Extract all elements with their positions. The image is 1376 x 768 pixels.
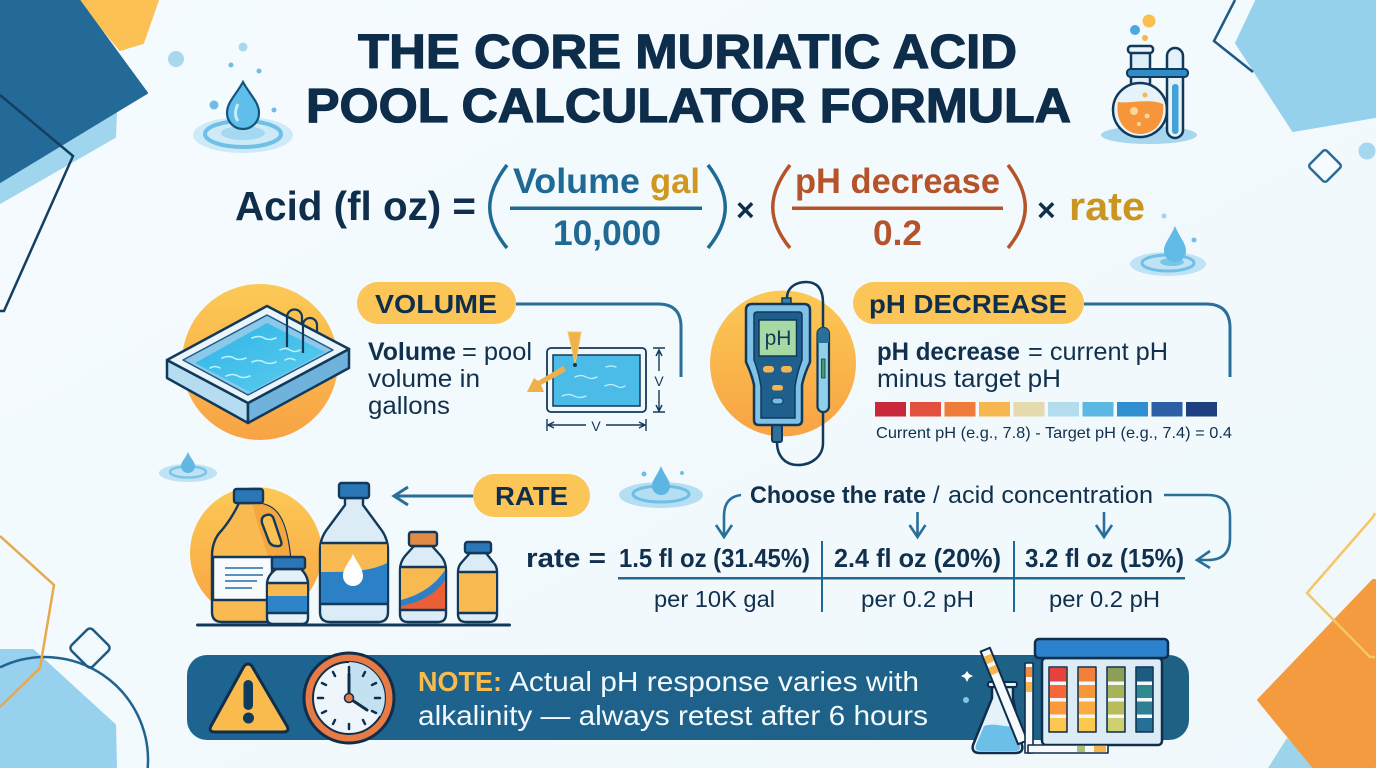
text: volume definition: gallons xyxy=(368,392,450,420)
arrow: rate to bottles xyxy=(394,487,473,505)
icon: water drop right of formula xyxy=(1130,214,1206,276)
heading pill: volume: VOLUME xyxy=(375,289,497,319)
rate table: 2.4 fl oz (20%) xyxy=(834,543,1001,573)
text: note: alkalinity — always retest after 6 hours xyxy=(418,700,928,731)
rate table: per 10K gal xyxy=(654,586,775,612)
background shapes: bottom left xyxy=(0,536,148,768)
rate table: per 0.2 pH xyxy=(1049,586,1160,612)
background shapes: top left xyxy=(0,0,184,311)
panel: pH decrease xyxy=(710,282,1232,465)
text: choose the rate: acid concentration xyxy=(948,482,1153,509)
formula left side: Acid (fl oz) = xyxy=(235,183,476,229)
multiply sign: × xyxy=(736,192,755,228)
text: volume definition: Volume xyxy=(368,338,456,366)
formula xyxy=(235,162,1145,253)
diagram: pool dimensions: V xyxy=(591,418,601,434)
volume fraction: 10,000 xyxy=(553,214,661,253)
text: choose the rate: Choose the rate xyxy=(750,482,926,509)
rate table: per 0.2 pH xyxy=(861,586,974,612)
icon: pH meter: pH xyxy=(765,327,791,350)
note banner xyxy=(187,639,1189,753)
pH decrease fraction: pH decrease xyxy=(795,162,1000,201)
title: POOL CALCULATOR FORMULA xyxy=(306,80,1071,133)
text: pH decrease definition: pH decrease xyxy=(877,338,1020,366)
icon: flask and pH test strips xyxy=(961,639,1168,753)
panel: rate xyxy=(190,474,1230,626)
heading pill: pH decrease xyxy=(853,282,1084,324)
connector line: pH decrease xyxy=(1084,304,1230,377)
text: choose the rate: / xyxy=(933,482,940,509)
text: note: NOTE: xyxy=(418,666,502,697)
title: THE CORE MURIATIC ACID xyxy=(358,26,1017,79)
connector line: volume xyxy=(516,304,681,377)
background shapes: top right xyxy=(1214,0,1376,183)
icon: warning triangle xyxy=(210,664,288,732)
diagram: pool dimensions xyxy=(527,332,665,434)
rate table xyxy=(526,541,1185,612)
volume fraction: Volume xyxy=(513,162,640,201)
rate table: rate = xyxy=(526,543,606,573)
rate table: 3.2 fl oz (15%) xyxy=(1025,543,1184,573)
icon: swimming pool xyxy=(167,284,349,440)
pH colour scale xyxy=(875,402,1217,416)
pH decrease fraction: 0.2 xyxy=(873,214,922,253)
text: pH decrease definition: minus target pH xyxy=(877,365,1061,393)
text: note: Actual pH response varies with xyxy=(509,666,919,697)
text: volume definition: = pool xyxy=(462,338,532,366)
heading pill: volume xyxy=(357,282,516,324)
heading pill: pH decrease: pH DECREASE xyxy=(869,289,1067,319)
diagram: pool dimensions: V xyxy=(654,373,664,389)
icon: laboratory flask and test tube xyxy=(1101,14,1197,144)
icon: pH meter xyxy=(710,282,856,465)
title xyxy=(306,26,1071,133)
heading pill: rate xyxy=(473,474,590,517)
text: pH example: Current pH (e.g., 7.8) - Target pH (e.g., 7.4) = 0.4 xyxy=(876,425,1232,442)
text: pH decrease definition: = current pH xyxy=(1028,338,1168,366)
panel: volume xyxy=(167,282,681,440)
volume fraction: gal xyxy=(650,162,700,201)
icon: drop center xyxy=(619,466,703,508)
icon: water drop top left xyxy=(193,42,293,153)
background shapes: bottom right xyxy=(1258,513,1375,768)
multiply sign: × xyxy=(1037,192,1056,228)
icon: small drop left xyxy=(159,452,217,482)
text: volume definition: volume in xyxy=(368,365,480,393)
rate table: 1.5 fl oz (31.45%) xyxy=(619,543,810,573)
icon: acid bottles xyxy=(190,483,511,626)
pH decrease fraction xyxy=(773,162,1025,253)
rate term: rate xyxy=(1069,185,1145,229)
heading pill: rate: RATE xyxy=(495,481,568,511)
icon: clock xyxy=(304,653,394,743)
arrows: choose the rate to options xyxy=(716,495,1230,568)
volume fraction xyxy=(490,162,725,253)
